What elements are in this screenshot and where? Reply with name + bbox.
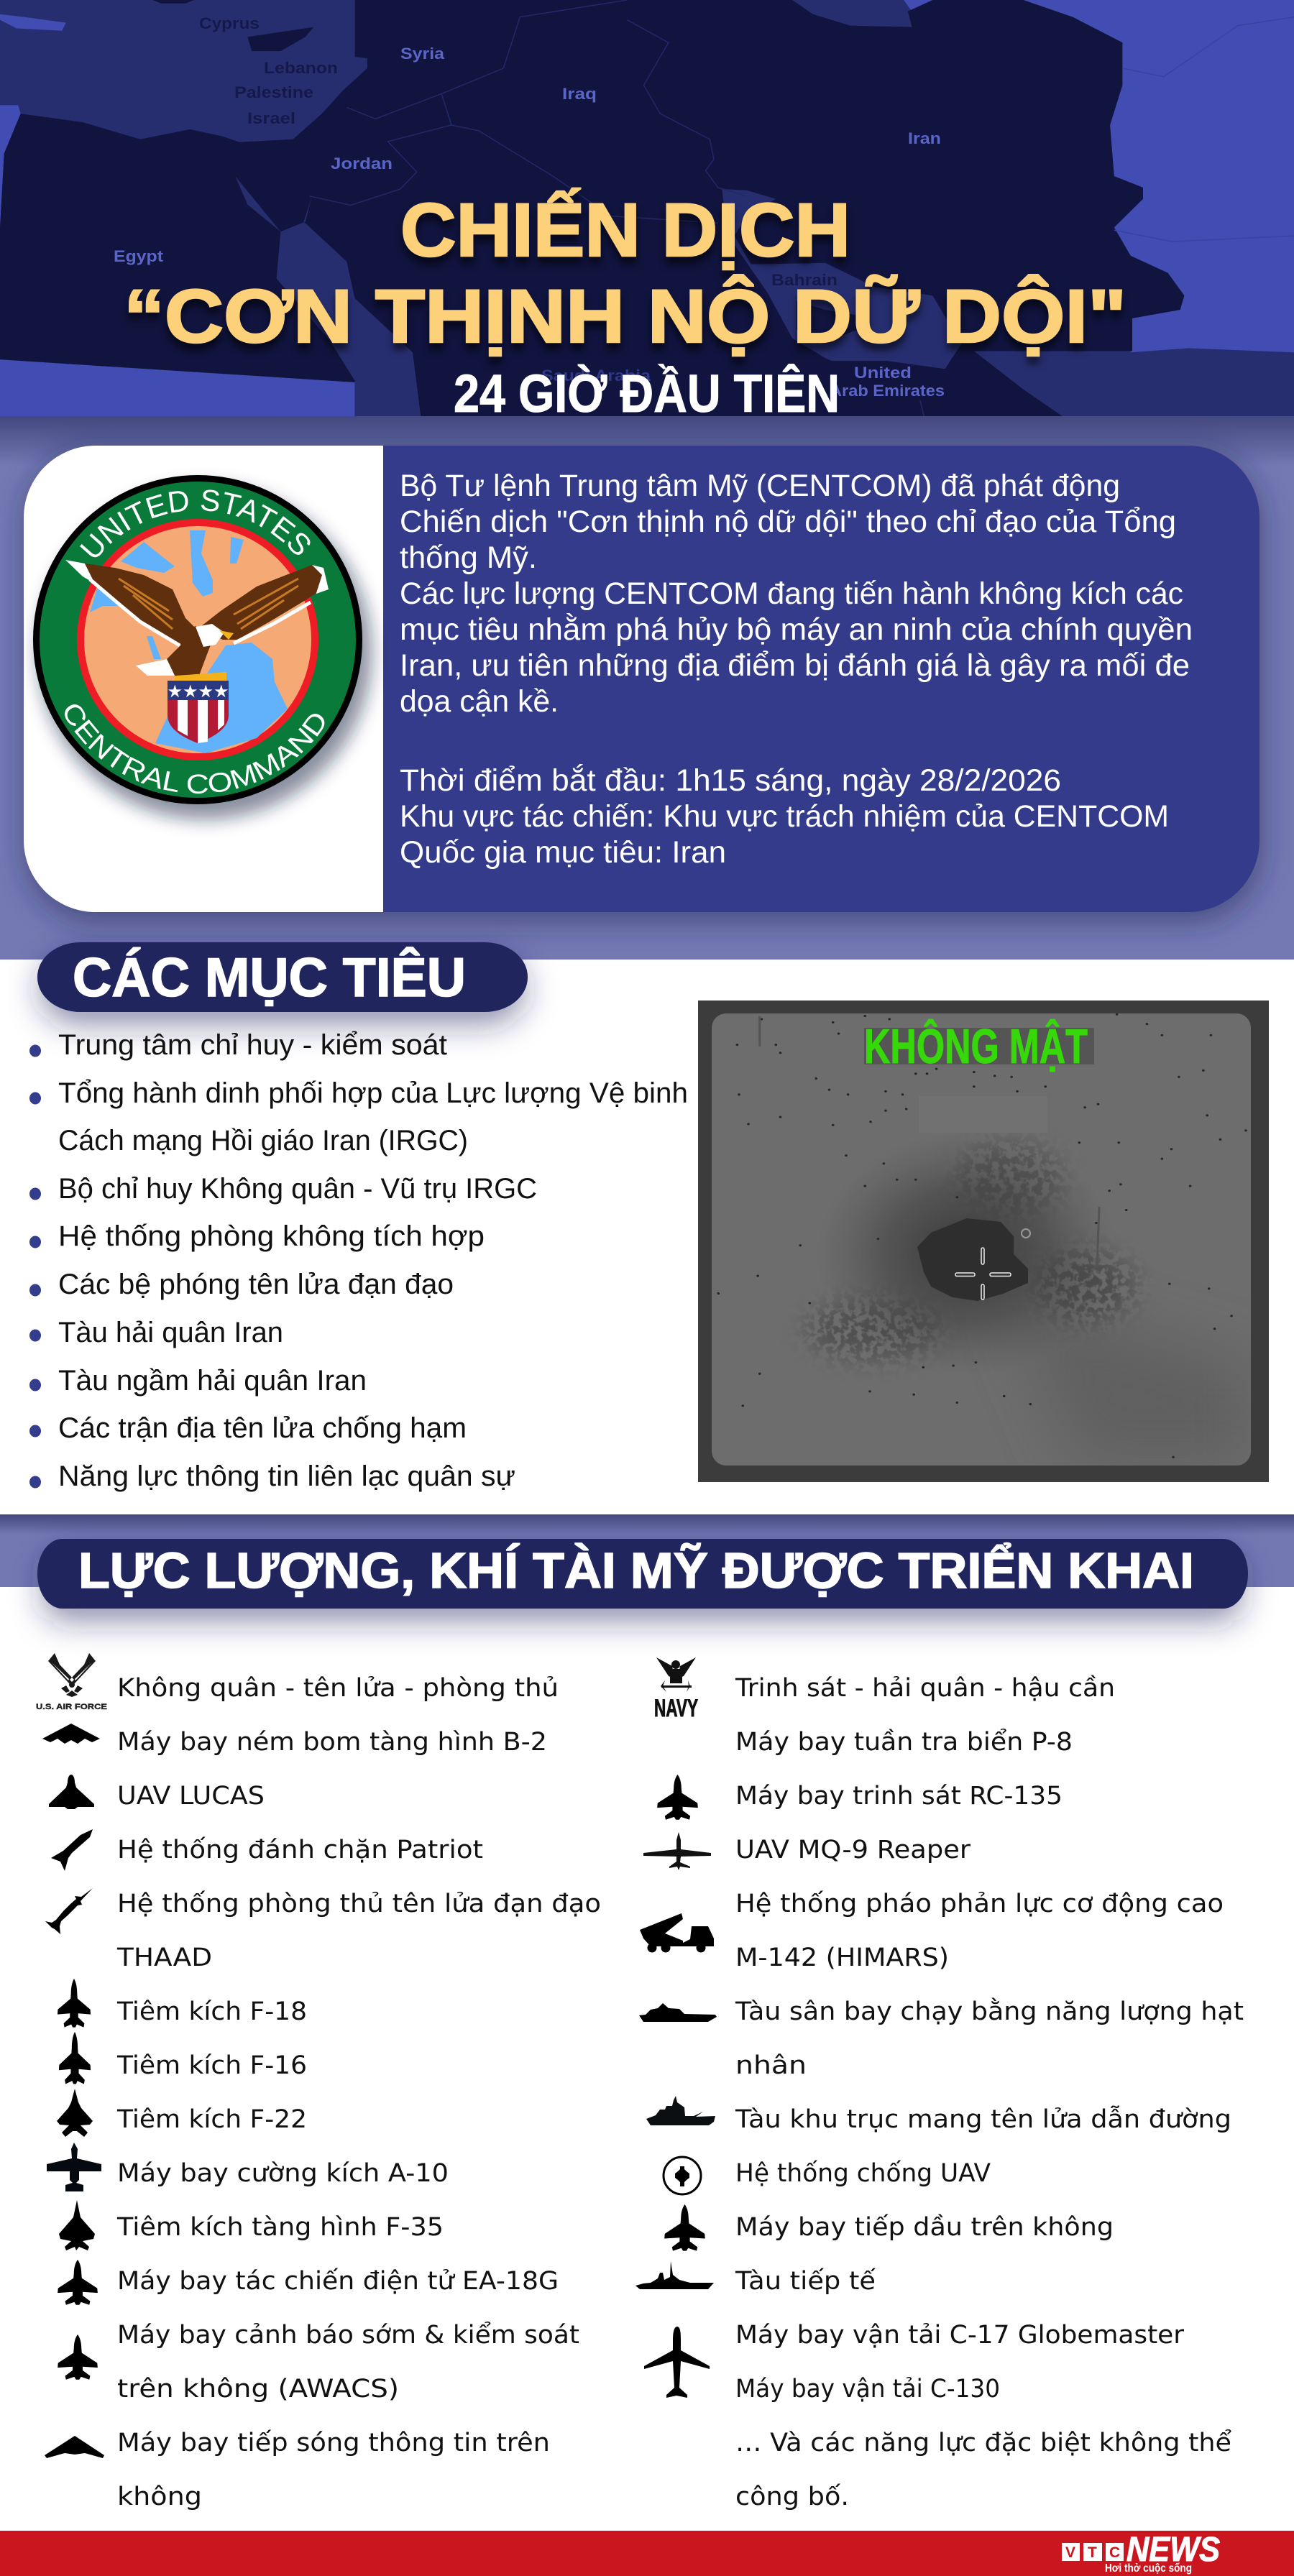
logo: VTC News: C <box>1109 2544 1120 2561</box>
list: forces, left column: Tiêm kích F-18 <box>116 1997 307 2026</box>
logo: VTC News: T <box>1088 2544 1097 2561</box>
list: forces, right column: UAV MQ-9 Reaper <box>735 1836 971 1864</box>
list: forces, right column: … Và các năng lực đặc biệt không thể <box>735 2428 1231 2457</box>
list: forces, left column: Không quân - tên lửa - phòng thủ <box>117 1674 559 1703</box>
icon: CENTCOM emblem <box>26 474 383 832</box>
icon: counter-UAV <box>664 2157 701 2194</box>
list: forces, right column: Máy bay trinh sát RC-135 <box>735 1782 1063 1811</box>
list: targets: Hệ thống phòng không tích hợp <box>58 1220 485 1252</box>
list: targets: Tổng hành dinh phối hợp của Lực lượng Vệ binh <box>58 1077 688 1109</box>
logo panel <box>24 446 383 912</box>
list: forces, left column: trên không (AWACS) <box>117 2375 399 2404</box>
list: forces, right column: Máy bay vận tải C-17 Globemaster <box>735 2321 1185 2350</box>
map country labels: Lebanon <box>264 59 338 77</box>
list: forces, left column: Tiêm kích tàng hình F-35 <box>116 2213 444 2242</box>
list: targets: Tàu ngầm hải quân Iran <box>58 1365 367 1397</box>
text block: intro: Các lực lượng CENTCOM đang tiến hành không kích các <box>400 576 1183 611</box>
list: forces, left column: Hệ thống phòng thủ tên lửa đạn đạo <box>117 1890 601 1918</box>
map country labels: Syria <box>400 45 445 63</box>
text block: intro: Bộ Tư lệnh Trung tâm Mỹ (CENTCOM) đã phát động <box>400 469 1120 503</box>
subtitle: 24 GIỜ ĐẦU TIÊN <box>454 364 840 423</box>
text block: intro: dọa cận kề. <box>400 684 559 719</box>
map country labels: Jordan <box>331 155 393 172</box>
list: forces, left column: THAAD <box>116 1944 212 1972</box>
icon: tanker aircraft <box>664 2204 705 2251</box>
icon: CENTCOM emblem: UNITED STATES <box>80 490 311 558</box>
heading: targets: CÁC MỤC TIÊU <box>73 947 466 1008</box>
icon: F-18 <box>58 1979 91 2028</box>
list: forces, left column: Máy bay ném bom tàng hình B-2 <box>117 1728 547 1757</box>
icon: A-10 <box>47 2143 101 2191</box>
list: forces, left column: không <box>117 2483 202 2511</box>
title: CHIẾN DỊCH <box>400 188 850 272</box>
band: forces background <box>0 1514 1294 1587</box>
band: intro background <box>0 416 1294 960</box>
list: forces, right column: công bố. <box>735 2483 849 2511</box>
icon: F-16 <box>59 2032 91 2084</box>
text block: intro <box>400 469 1193 870</box>
map country labels: Bahrain <box>771 271 838 289</box>
logo: VTC News <box>1062 2531 1220 2575</box>
icon: destroyer <box>646 2096 715 2125</box>
list: targets: Bộ chỉ huy Không quân - Vũ trụ IRGC <box>58 1173 537 1205</box>
list: forces, left column: Tiêm kích F-16 <box>116 2051 307 2080</box>
photo: strike aerial view <box>698 1000 1269 1482</box>
list: forces, right column: Máy bay vận tải C-130 <box>735 2375 1000 2404</box>
icon: THAAD missile <box>45 1888 93 1934</box>
list: forces, left column: UAV LUCAS <box>117 1782 265 1811</box>
icon: CENTCOM emblem: ★★★★ <box>167 682 229 702</box>
label: classified: KHÔNG MẬT <box>864 1018 1088 1074</box>
text block: intro: mục tiêu nhằm phá hủy bộ máy an ninh của chính quyền <box>400 612 1193 647</box>
list: targets: Trung tâm chỉ huy - kiểm soát <box>58 1029 447 1061</box>
panel: intro card <box>24 446 1259 912</box>
icon: Patriot missile <box>51 1829 93 1871</box>
list: forces, right column: Tàu khu trục mang tên lửa dẫn đường <box>735 2104 1231 2134</box>
text block: intro: thống Mỹ. <box>400 540 537 575</box>
list: forces, right column: Tàu tiếp tế <box>735 2267 876 2296</box>
text panel <box>383 446 1259 912</box>
list: forces, left column <box>116 1674 601 2511</box>
list: targets: Các bệ phóng tên lửa đạn đạo <box>58 1269 454 1300</box>
logo: VTC News: V <box>1065 2544 1075 2561</box>
list: targets: Cách mạng Hồi giáo Iran (IRGC) <box>58 1125 468 1156</box>
list: forces, left column: Máy bay tác chiến điện tử EA-18G <box>117 2267 559 2296</box>
title <box>124 188 1126 359</box>
map country labels: Saudi Arabia <box>541 367 651 385</box>
icon: MQ-9 Reaper <box>643 1832 711 1870</box>
icon: US Navy logo <box>654 1657 698 1722</box>
icon: HIMARS <box>640 1913 714 1952</box>
footer bar <box>0 2531 1294 2576</box>
heading: forces <box>37 1539 1248 1621</box>
map country labels: Palestine <box>234 83 313 101</box>
map country labels: Arab Emirates <box>830 382 945 400</box>
icon: CENTCOM emblem: CENTRAL COMMAND <box>65 704 325 794</box>
logo: VTC News: Hơi thở cuộc sống <box>1105 2562 1192 2575</box>
text block: intro: Chiến dịch "Cơn thịnh nộ dữ dội" theo chỉ đạo của Tổng <box>400 505 1176 539</box>
list: targets <box>29 1029 688 1492</box>
title: “CƠN THỊNH NỘ DỮ DỘI" <box>124 274 1126 359</box>
icon: B-2 <box>42 1724 100 1744</box>
icon: supply ship <box>635 2261 714 2289</box>
list: forces, left column: Tiêm kích F-22 <box>116 2105 307 2134</box>
text block: intro: Thời điểm bắt đầu: 1h15 sáng, ngày 28/2/2026 <box>400 763 1061 798</box>
logo: VTC News: NEWS <box>1126 2531 1220 2569</box>
text block: intro: Khu vực tác chiến: Khu vực trách nhiệm của CENTCOM <box>400 799 1169 834</box>
icon: US Air Force logo <box>36 1653 107 1711</box>
list: forces, left column: Máy bay cường kích A-10 <box>117 2159 449 2188</box>
list: forces, right column: M-142 (HIMARS) <box>735 1944 949 1972</box>
icon: AWACS <box>58 2334 98 2380</box>
list: targets: Năng lực thông tin liên lạc quân sự <box>58 1460 515 1492</box>
list: targets: Tàu hải quân Iran <box>58 1317 283 1348</box>
heading: targets <box>37 942 528 1024</box>
map country labels: Iran <box>908 129 941 147</box>
map country labels: Iraq <box>562 85 597 103</box>
icon: C-17 transport <box>644 2327 710 2398</box>
icon: communications relay aircraft <box>45 2436 104 2458</box>
list: forces, right column: Hệ thống pháo phản lực cơ động cao <box>735 1890 1224 1918</box>
icon: US Air Force logo: U.S. AIR FORCE <box>36 1703 107 1711</box>
icon: F-22 <box>57 2089 93 2137</box>
list: forces, left column: Máy bay tiếp sóng thông tin trên <box>117 2429 550 2457</box>
icon: EA-18G <box>58 2260 98 2305</box>
list: forces, right column: Tàu sân bay chạy bằng năng lượng hạt <box>735 1997 1244 2026</box>
list: forces, left column: Máy bay cảnh báo sớm & kiểm soát <box>117 2320 579 2350</box>
heading: forces: LỰC LƯỢNG, KHÍ TÀI MỸ ĐƯỢC TRIỂN KHAI <box>78 1542 1194 1598</box>
map country labels <box>114 14 945 400</box>
list: forces, left column: Hệ thống đánh chặn Patriot <box>117 1836 483 1864</box>
crosshair <box>955 1248 1011 1300</box>
text block: intro: Quốc gia mục tiêu: Iran <box>400 835 726 870</box>
map country labels: Egypt <box>114 247 164 265</box>
text block: intro: Iran, ưu tiên những địa điểm bị đánh giá là gây ra mối đe <box>400 648 1190 683</box>
list: forces, right column: Hệ thống chống UAV <box>735 2159 991 2188</box>
icon: aircraft carrier <box>639 2003 717 2022</box>
list: forces, right column: Máy bay tiếp dầu trên không <box>735 2213 1114 2242</box>
map country labels: Cyprus <box>199 14 260 32</box>
list: forces, right column: nhân <box>735 2051 807 2080</box>
list: targets: Các trận địa tên lửa chống hạm <box>58 1412 467 1444</box>
header: map background <box>0 0 1294 418</box>
icon: LUCAS UAV <box>49 1775 94 1809</box>
map country labels: United <box>854 364 912 382</box>
list: forces, right column <box>735 1674 1244 2511</box>
list: forces, right column: Máy bay tuần tra biển P-8 <box>735 1727 1073 1757</box>
list: forces, right column: Trinh sát - hải quân - hậu cần <box>735 1674 1115 1703</box>
icon: RC-135 <box>657 1775 698 1820</box>
map country labels: Israel <box>247 109 295 127</box>
icon: F-35 <box>59 2200 95 2250</box>
icon: US Navy logo: NAVY <box>654 1695 698 1722</box>
